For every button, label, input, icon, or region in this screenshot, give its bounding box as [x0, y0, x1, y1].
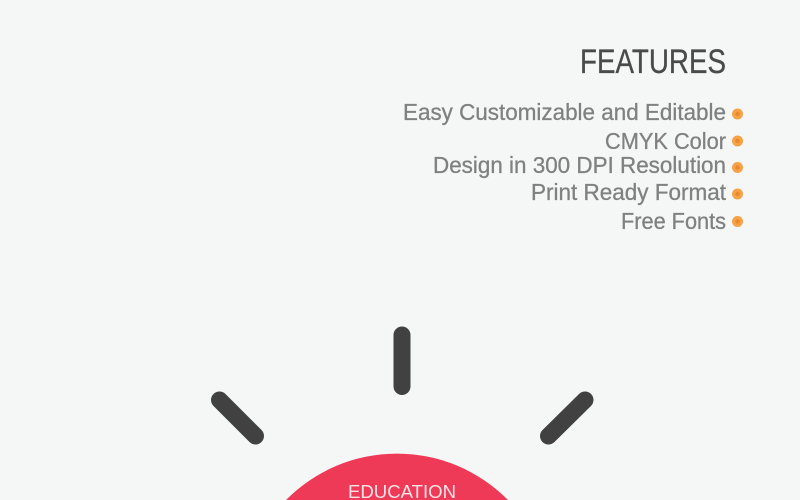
red circle, cropped by the bottom edge [286, 454, 508, 500]
feature: cmyk color: CMYK Color [605, 128, 726, 154]
feature list [403, 99, 743, 234]
feature: free fonts: Free Fonts [621, 208, 726, 234]
heading: features: FEATURES [580, 43, 726, 81]
feature: print ready: Print Ready Format [531, 179, 727, 205]
feature: 300 dpi: Design in 300 DPI Resolution [433, 152, 726, 178]
sun rays [220, 335, 585, 436]
feature: easy customizable: Easy Customizable and Editable [403, 99, 726, 125]
